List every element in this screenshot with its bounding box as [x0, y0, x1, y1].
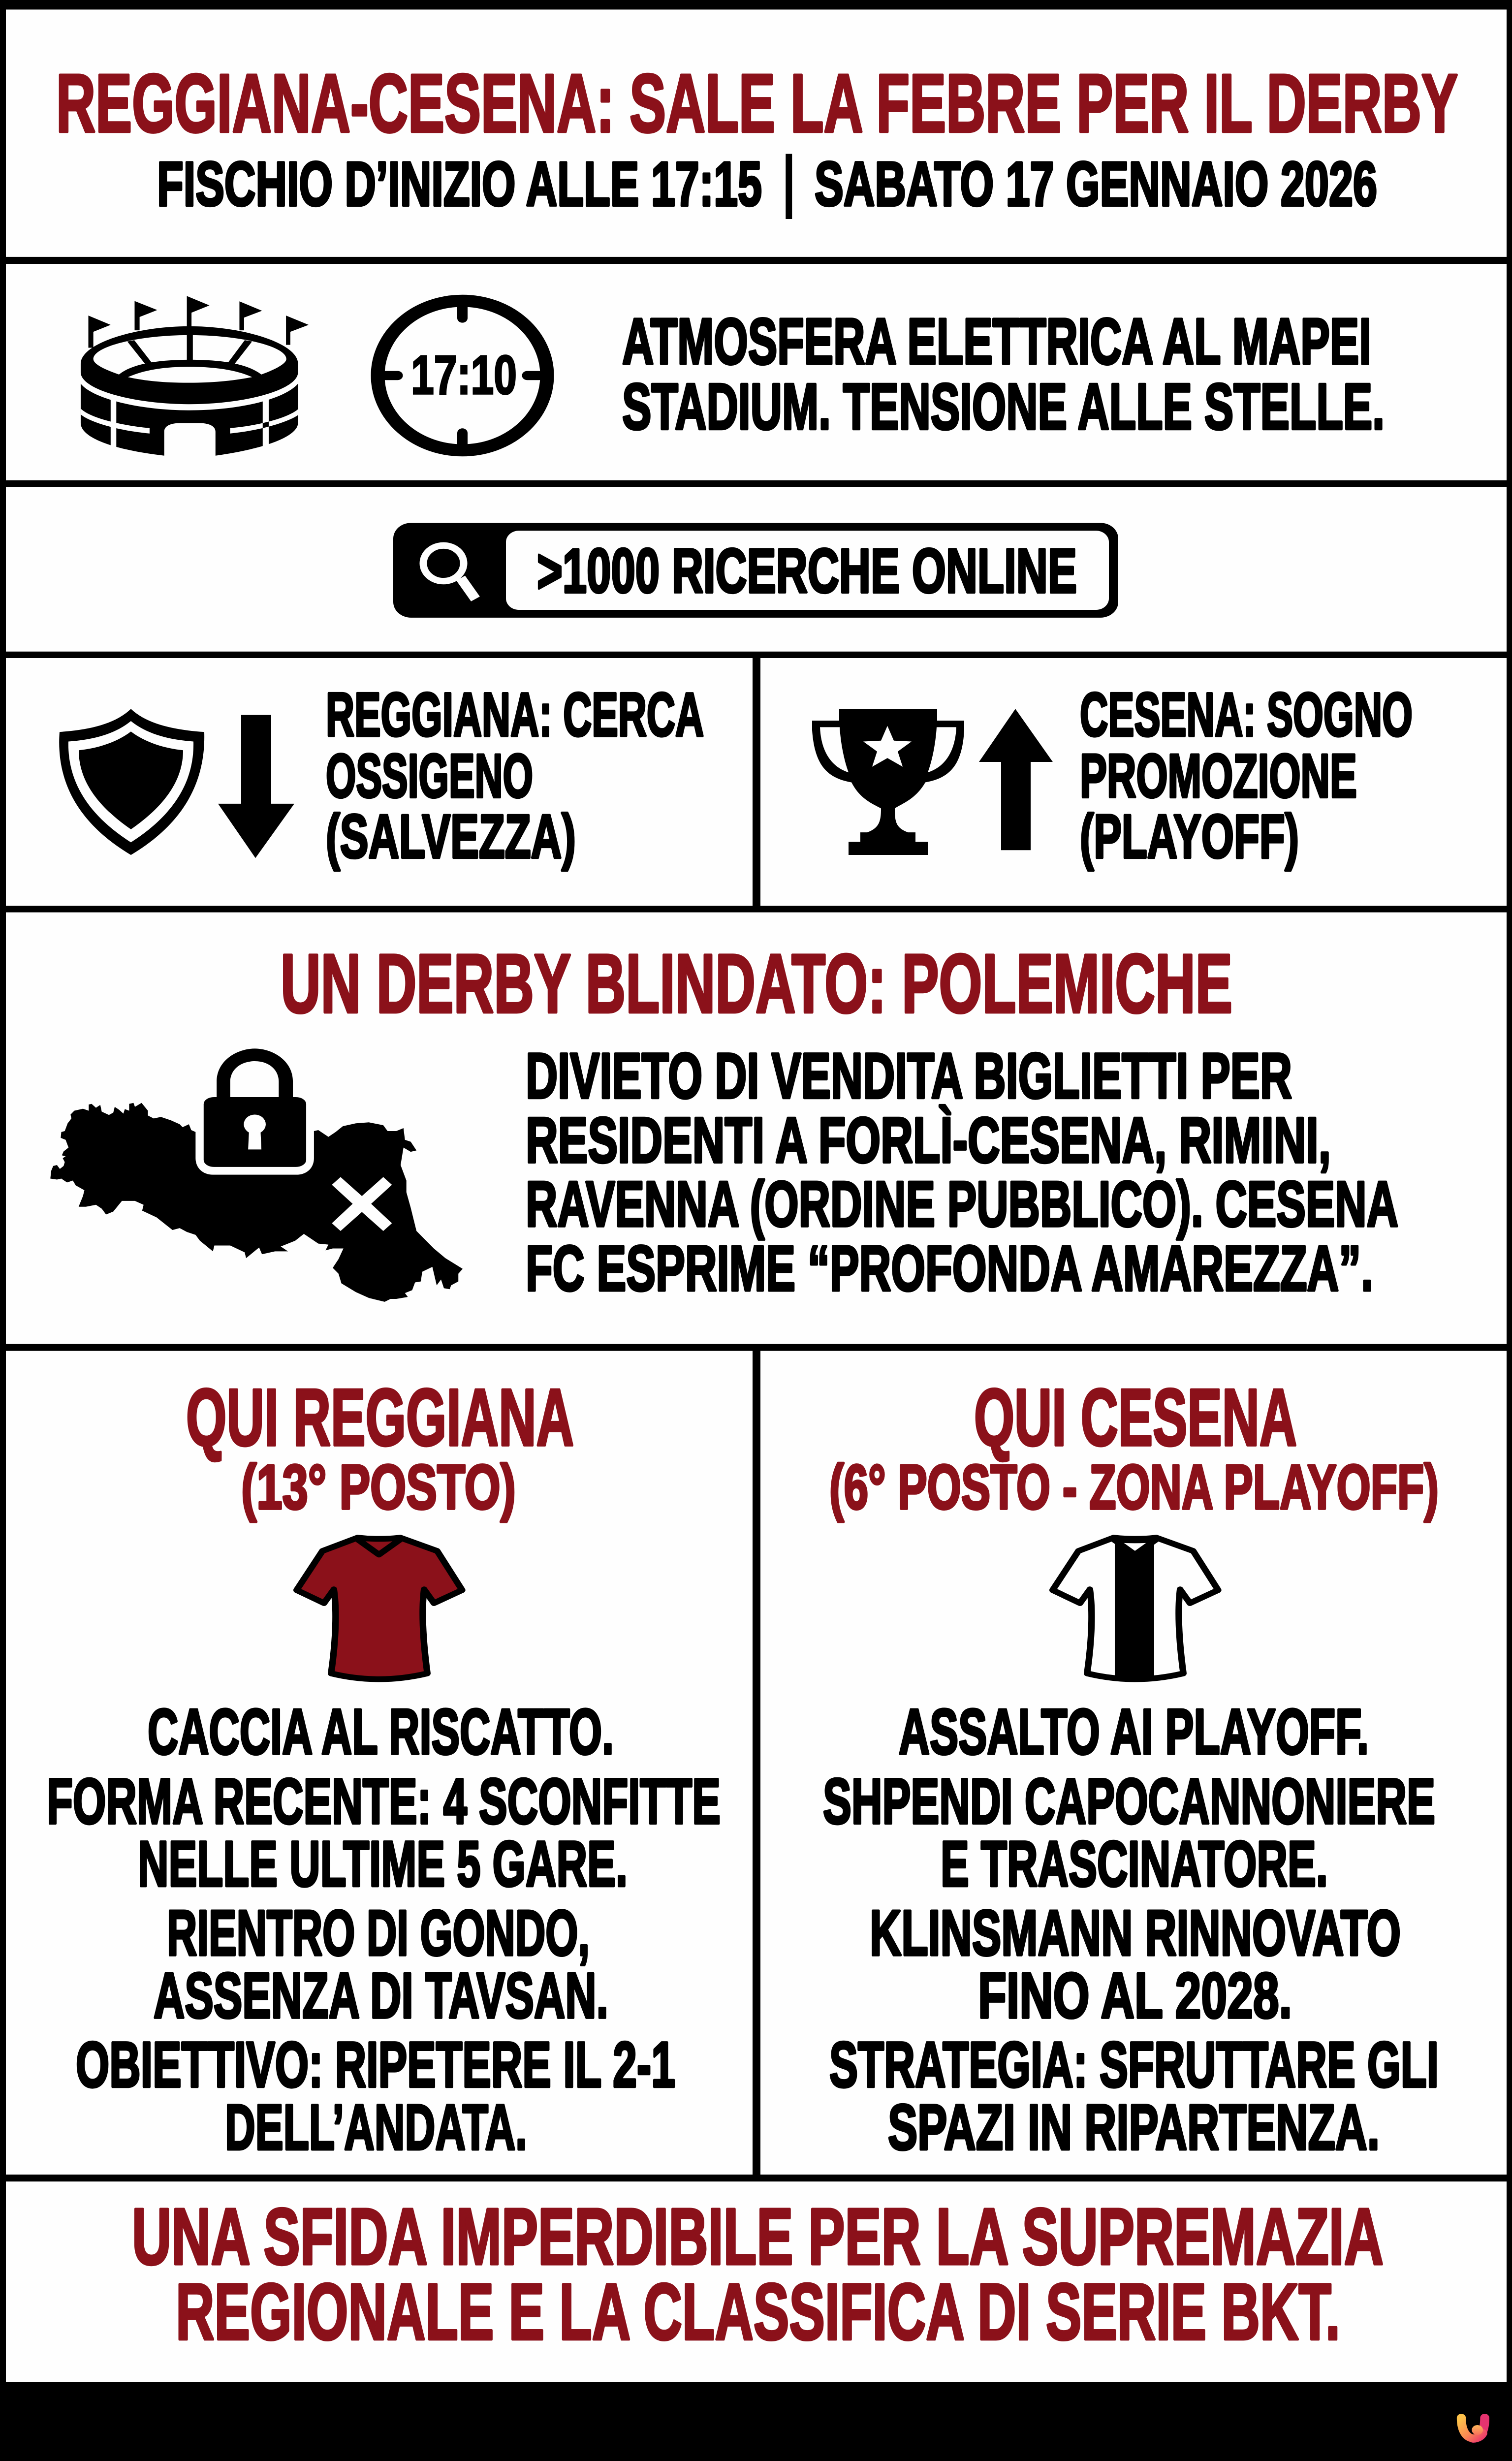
- icon: logo mark: [1461, 2418, 1485, 2439]
- search bar: [393, 523, 1118, 618]
- text: Cesena: [1080, 681, 1413, 871]
- arrow: down: [218, 715, 294, 858]
- subtitle: kick-off and date: FISCHIO D’INIZIO ALLE 17:15: [157, 149, 762, 219]
- icon: magnifying glass: [423, 545, 475, 599]
- text: Reggiana notes: NELLE ULTIME 5 GARE.: [138, 1828, 628, 1900]
- panel: Cesena goal: [760, 658, 1507, 906]
- panel: closing line: [6, 2181, 1507, 2382]
- text: Reggiana: (SALVEZZA): [326, 802, 576, 871]
- text: Reggiana notes: OBIETTIVO: RIPETERE IL 2-1: [76, 2029, 675, 2101]
- text: Reggiana notes: [47, 1696, 721, 2163]
- text: ticket ban: [526, 1040, 1398, 1304]
- text: Reggiana: OSSIGENO: [326, 742, 533, 811]
- text: Reggiana: [326, 681, 704, 871]
- text: Cesena notes: FINO AL 2028.: [978, 1959, 1292, 2031]
- panel: title: [6, 9, 1507, 257]
- search bar: >1000 RICERCHE ONLINE: [537, 536, 1077, 606]
- text: atmosphere: [622, 305, 1385, 443]
- icon: clock showing 17:10: [378, 301, 547, 450]
- subheading: 13th place: (13° POSTO): [241, 1451, 516, 1522]
- panel: Reggiana goal: [6, 658, 753, 906]
- text: Reggiana notes: ASSENZA DI TAVSAN.: [154, 1959, 608, 2031]
- text: closing statement: [132, 2192, 1384, 2356]
- icon: red jersey: [297, 1538, 462, 1679]
- panel: armoured derby: [6, 913, 1507, 1344]
- icon: trophy: [812, 709, 964, 855]
- subtitle: kick-off and date: |: [779, 141, 799, 219]
- text: Cesena notes: [823, 1696, 1439, 2163]
- icon: shield: [59, 709, 204, 855]
- icon: stadium: [81, 296, 309, 456]
- text: Reggiana notes: DELL’ANDATA.: [225, 2091, 527, 2163]
- map: Emilia-Romagna silhouette: [50, 1103, 463, 1302]
- text: Reggiana notes: FORMA RECENTE: 4 SCONFITTE: [47, 1766, 721, 1837]
- panel: atmosphere: [6, 264, 1507, 480]
- text: Cesena: (PLAYOFF): [1080, 802, 1299, 871]
- heading: Qui Reggiana: QUI REGGIANA: [186, 1372, 574, 1463]
- arrow: up: [979, 709, 1053, 850]
- text: Reggiana notes: CACCIA AL RISCATTO.: [148, 1696, 614, 1767]
- icon: X mark: [332, 1177, 392, 1231]
- text: Reggiana: REGGIANA: CERCA: [326, 681, 704, 749]
- icon: region map with padlock and X: [50, 1048, 463, 1302]
- panel: Qui Cesena: [760, 1351, 1507, 2175]
- icon: padlock: [204, 1048, 306, 1167]
- panel: online searches: [6, 487, 1507, 652]
- panel: Qui Reggiana: [6, 1351, 753, 2175]
- icon: black and white jersey: [1053, 1538, 1218, 1681]
- text: Reggiana notes: RIENTRO DI GONDO,: [167, 1897, 590, 1969]
- icon: clock showing 17:10: 17:10: [411, 345, 517, 406]
